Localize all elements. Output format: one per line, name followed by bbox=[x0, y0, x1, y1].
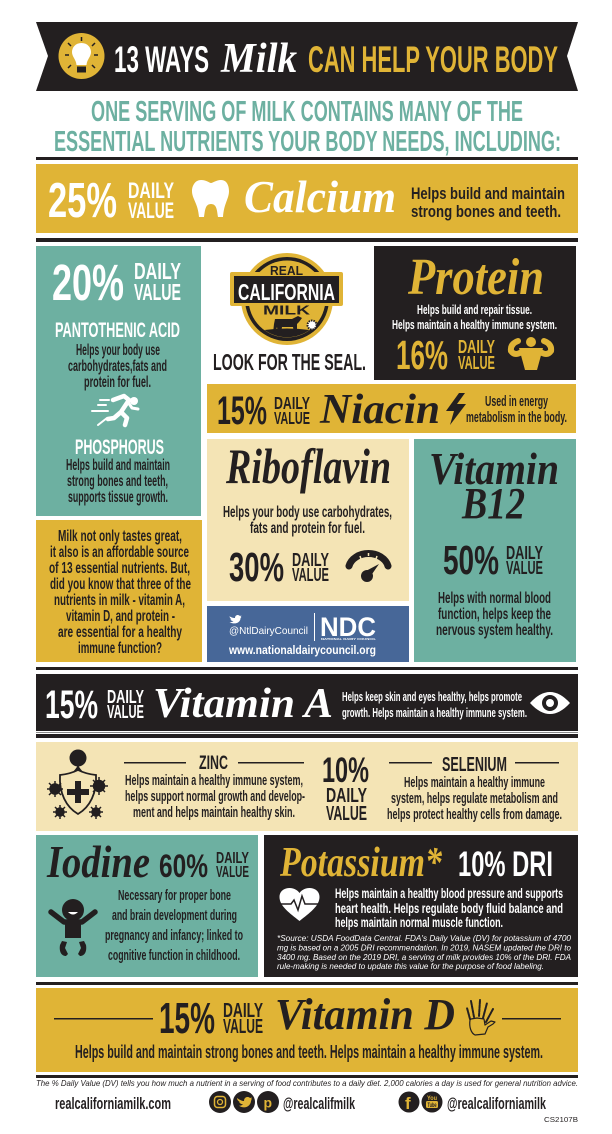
vitamin D script title: Vitamin D bbox=[275, 990, 455, 1039]
icon: pinterest bbox=[257, 1091, 279, 1113]
calcium daily value bbox=[128, 178, 174, 223]
iodine description: pregnancy and infancy; linked to bbox=[105, 927, 243, 944]
panel: riboflavin bbox=[207, 438, 409, 601]
seal logo bbox=[230, 253, 343, 345]
B12 percent: 50% bbox=[443, 537, 499, 583]
B12 daily value: VALUE bbox=[506, 558, 543, 578]
icon: facebook bbox=[398, 1092, 420, 1113]
seal caption: LOOK FOR THE SEAL. bbox=[213, 349, 366, 375]
zinc heading: ZINC bbox=[199, 753, 228, 774]
calcium script title: Calcium bbox=[244, 171, 396, 222]
potassium script title: Potassium* bbox=[279, 840, 443, 886]
seal word: milk: MILK bbox=[263, 304, 310, 318]
riboflavin daily value: DAILY bbox=[292, 550, 329, 570]
iodine daily value bbox=[216, 850, 249, 881]
icon: pinterest: p bbox=[264, 1094, 272, 1110]
panel: potassium bbox=[264, 835, 578, 977]
vitamin A percent: 15% bbox=[45, 683, 98, 727]
title banner bbox=[36, 22, 578, 91]
website link: realcaliforniamilk.com bbox=[55, 1094, 171, 1113]
vitamin A description bbox=[342, 690, 527, 720]
panel: affordable source callout: of 13 essential nutrients. But, bbox=[49, 560, 190, 577]
iodine description bbox=[105, 887, 243, 964]
iodine daily value: VALUE bbox=[216, 864, 249, 881]
phosphorus text bbox=[66, 457, 170, 506]
vitamin B12 script title: B12 bbox=[461, 479, 525, 528]
10 percent daily value bbox=[326, 785, 367, 825]
riboflavin description: Helps your body use carbohydrates, bbox=[223, 504, 392, 521]
panel: affordable source callout: nutrients in milk - vitamin A, bbox=[54, 592, 185, 609]
daily value: DAILY bbox=[134, 258, 181, 284]
icon: lightning bolt bbox=[446, 393, 466, 425]
potassium source note: mg is based on a 2005 DRI recommendation. In 2019, NASEM updated the DRI to bbox=[277, 944, 572, 952]
icon: instagram bbox=[209, 1091, 231, 1113]
icon: twitter bbox=[233, 1091, 255, 1113]
panel: affordable source callout: immune function? bbox=[78, 640, 162, 657]
handle: realcalifmilk: @realcalifmilk bbox=[283, 1094, 355, 1113]
pantothenic text: carbohydrates,fats and bbox=[68, 358, 167, 375]
potassium description: helps maintain normal muscle function. bbox=[335, 914, 503, 930]
icon: eye bbox=[530, 692, 570, 714]
riboflavin description: fats and protein for fuel. bbox=[250, 520, 365, 537]
riboflavin description bbox=[223, 504, 392, 537]
vitamin B12 script title bbox=[429, 443, 559, 528]
iodine daily value: DAILY bbox=[216, 850, 249, 867]
title: milk script: Milk bbox=[220, 36, 297, 82]
B12 daily value: DAILY bbox=[506, 543, 543, 563]
B12 description: function, helps keep the bbox=[438, 606, 551, 623]
icon: runner bbox=[92, 396, 138, 425]
icon: youtube: You bbox=[427, 1096, 437, 1102]
niacin daily value: VALUE bbox=[274, 408, 310, 428]
pantothenic text bbox=[68, 342, 167, 391]
potassium source note: *Source: USDA FoodData Central. FDA's Daily Value (DV) for potassium of 4700 bbox=[277, 934, 572, 943]
panel: vitamin A bbox=[36, 674, 578, 731]
panel: zinc and selenium bbox=[36, 742, 578, 831]
calcium description: strong bones and teeth. bbox=[411, 202, 561, 221]
potassium source note: rule-making is needed to update this value for the purpose of food labeling. bbox=[277, 962, 544, 971]
niacin script title: Niacin bbox=[319, 387, 440, 433]
icon: baby bbox=[51, 899, 95, 956]
NDC logo: NATIONAL DAIRY COUNCIL bbox=[321, 637, 376, 641]
phosphorus text: Helps build and maintain bbox=[66, 457, 170, 474]
B12 description bbox=[436, 590, 553, 639]
panel: protein bbox=[374, 246, 576, 380]
seal word: real: REAL bbox=[270, 264, 303, 278]
panel: affordable source callout: did you know that three of the bbox=[50, 576, 191, 593]
daily value bbox=[134, 258, 181, 305]
icon: youtube: Tube bbox=[428, 1103, 437, 1109]
riboflavin daily value: VALUE bbox=[292, 565, 329, 585]
selenium heading: SELENIUM bbox=[442, 754, 507, 776]
seal word: california: CALIFORNIA bbox=[238, 279, 335, 305]
phosphorus heading: PHOSPHORUS bbox=[75, 436, 164, 459]
potassium source note bbox=[277, 934, 572, 971]
icon: cow bbox=[273, 316, 302, 333]
daily value: VALUE bbox=[134, 279, 181, 305]
iodine description: Necessary for proper bone bbox=[118, 887, 231, 904]
NDC logo: NDC bbox=[320, 612, 376, 642]
title: 13 ways: 13 WAYS bbox=[114, 39, 209, 80]
twitter handle: @NtlDairyCouncil bbox=[229, 625, 308, 637]
calcium description bbox=[411, 184, 565, 221]
niacin description bbox=[466, 394, 567, 426]
protein script title: Protein bbox=[407, 249, 544, 306]
panel: calcium bbox=[36, 164, 578, 233]
icon: muscles bbox=[511, 337, 551, 370]
vitamin D percent: 15% bbox=[159, 994, 215, 1043]
icon: lightbulb bbox=[58, 33, 104, 79]
pantothenic heading: PANTOTHENIC ACID bbox=[55, 319, 180, 342]
pantothenic text: Helps your body use bbox=[76, 342, 160, 359]
zinc description: helps support normal growth and develop- bbox=[125, 789, 305, 805]
protein daily value: VALUE bbox=[458, 353, 495, 373]
pantothenic text: protein for fuel. bbox=[84, 374, 151, 391]
vitamin A script title: Vitamin A bbox=[153, 681, 333, 727]
handle: realcaliforniamilk: @realcaliforniamilk bbox=[447, 1094, 546, 1113]
panel: vitamin D bbox=[36, 988, 578, 1072]
riboflavin daily value bbox=[292, 550, 329, 585]
potassium description bbox=[335, 885, 563, 930]
calcium daily value: DAILY bbox=[128, 178, 174, 203]
zinc description: ment and helps maintain healthy skin. bbox=[133, 805, 295, 821]
icon: sun bbox=[308, 320, 316, 330]
protein percent: 16% bbox=[396, 332, 448, 378]
iodine description: and brain development during bbox=[112, 907, 237, 924]
10 percent daily value: DAILY bbox=[326, 785, 367, 807]
vitamin B12 script title: Vitamin bbox=[429, 443, 559, 494]
20 percent: 20% bbox=[52, 254, 124, 311]
protein description bbox=[392, 303, 557, 332]
calcium percent: 25% bbox=[48, 174, 117, 228]
10 percent: 10% bbox=[322, 751, 369, 790]
panel: niacin bbox=[207, 384, 576, 433]
panel: affordable source callout: vitamin D, and protein - bbox=[66, 608, 175, 625]
panel: affordable source callout: it also is an affordable source bbox=[50, 544, 189, 561]
icon: gauge bbox=[349, 553, 388, 582]
zinc description bbox=[125, 773, 305, 821]
niacin percent: 15% bbox=[217, 389, 267, 433]
B12 description: nervous system healthy. bbox=[436, 622, 553, 639]
riboflavin percent: 30% bbox=[229, 544, 284, 590]
icon: tooth bbox=[192, 180, 229, 217]
potassium percent: 10% DRI bbox=[458, 845, 553, 884]
icon: immune shield bbox=[47, 750, 108, 819]
panel: iodine bbox=[36, 835, 258, 977]
calcium description: Helps build and maintain bbox=[411, 184, 565, 203]
icon: twitter bird bbox=[229, 615, 242, 623]
vitamin D daily value: VALUE bbox=[223, 1016, 263, 1038]
panel: affordable source callout: are essential for a healthy bbox=[58, 624, 182, 641]
document code: CS2107B bbox=[544, 1115, 578, 1124]
phosphorus text: supports tissue growth. bbox=[68, 489, 168, 506]
10 percent daily value: VALUE bbox=[326, 803, 367, 825]
selenium description bbox=[387, 775, 562, 823]
icon: facebook: f bbox=[405, 1094, 411, 1113]
iodine percent: 60% bbox=[159, 848, 208, 884]
iodine script title: Iodine bbox=[46, 836, 150, 887]
subheading bbox=[54, 96, 561, 158]
riboflavin script title: Riboflavin bbox=[225, 438, 391, 494]
vitamin A daily value: DAILY bbox=[107, 687, 144, 707]
niacin daily value bbox=[274, 393, 310, 428]
potassium source note: 3400 mg. Based on the 2019 DRI, a serving of milk provides 10% of the DRI. FDA bbox=[277, 953, 571, 962]
website: www.nationaldairycouncil.org bbox=[228, 645, 376, 657]
vitamin A daily value bbox=[107, 687, 144, 722]
icon: youtube bbox=[422, 1092, 442, 1112]
iodine description: cognitive function in childhood. bbox=[108, 947, 240, 964]
phosphorus text: strong bones and teeth, bbox=[67, 473, 168, 490]
niacin daily value: DAILY bbox=[274, 393, 310, 413]
calcium daily value: VALUE bbox=[128, 198, 174, 223]
footnote: The % Daily Value (DV) tells you how much a nutrient in a serving of food contributes to a daily diet. 2,000 calories a day is used for general nutrition advice. bbox=[36, 1079, 578, 1088]
icon: heart bbox=[280, 888, 320, 921]
panel: pantothenic acid and phosphorus bbox=[36, 246, 201, 516]
panel: affordable source callout: Milk not only tastes great, bbox=[58, 528, 182, 545]
protein daily value bbox=[458, 337, 495, 373]
vitamin D daily value: DAILY bbox=[223, 1000, 263, 1022]
niacin description: Used in energy bbox=[485, 394, 548, 410]
zinc description: Helps maintain a healthy immune system, bbox=[125, 773, 303, 789]
icon: hand bones bbox=[467, 1000, 495, 1035]
panel: affordable source callout bbox=[36, 520, 202, 662]
vitamin D daily value bbox=[223, 1000, 263, 1038]
panel: vitamin B12 bbox=[414, 439, 576, 662]
protein daily value: DAILY bbox=[458, 337, 495, 357]
protein description: Helps build and repair tissue. bbox=[417, 303, 532, 317]
B12 daily value bbox=[506, 543, 543, 578]
vitamin A daily value: VALUE bbox=[107, 702, 144, 722]
panel: national dairy council bbox=[207, 606, 409, 662]
